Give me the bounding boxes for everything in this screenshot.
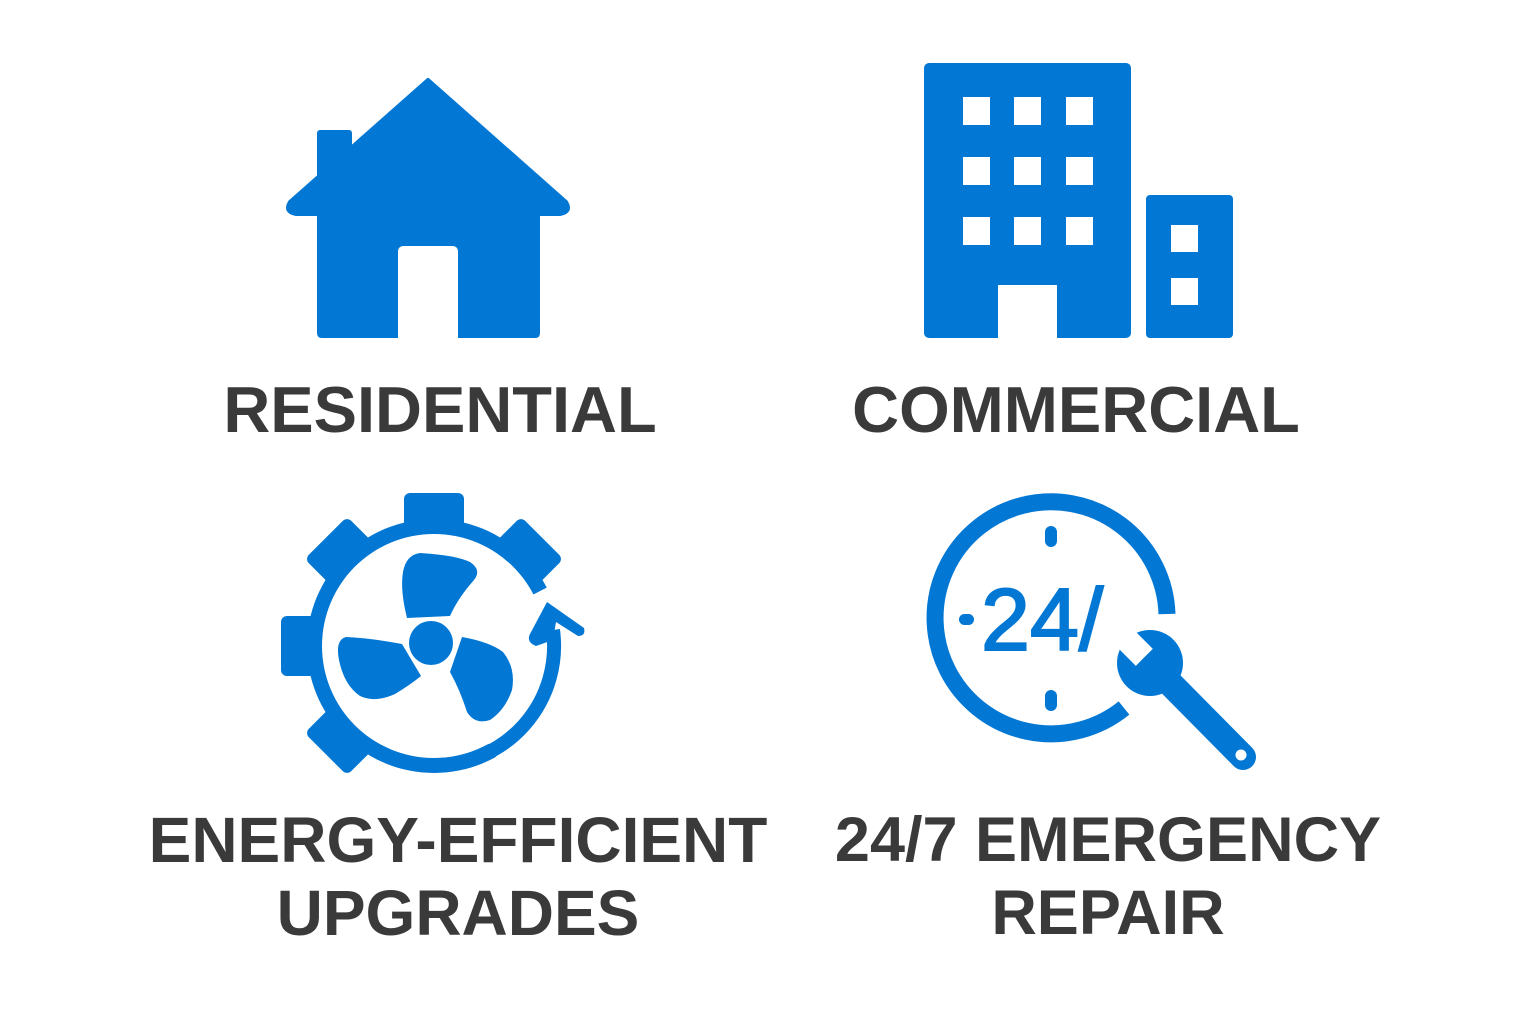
label: energy-efficient upgrades: UPGRADES [277, 877, 639, 949]
label: residential: RESIDENTIAL [223, 373, 657, 446]
label: commercial: COMMERCIAL [852, 373, 1300, 446]
label: energy-efficient upgrades [149, 804, 767, 949]
label: 24/7 emergency repair: 24/7 EMERGENCY [835, 805, 1381, 875]
icon: house [288, 80, 568, 338]
icon: office building [924, 63, 1233, 338]
icon: 24/7 clock with wrench [935, 502, 1246, 760]
label: 24/7 emergency repair [835, 805, 1381, 948]
icon: 24/7 clock with wrench: 24/ [981, 570, 1104, 669]
icon: gear with fan [281, 493, 600, 800]
label: energy-efficient upgrades: ENERGY-EFFICIENT [149, 804, 767, 876]
label: 24/7 emergency repair: REPAIR [991, 878, 1225, 948]
